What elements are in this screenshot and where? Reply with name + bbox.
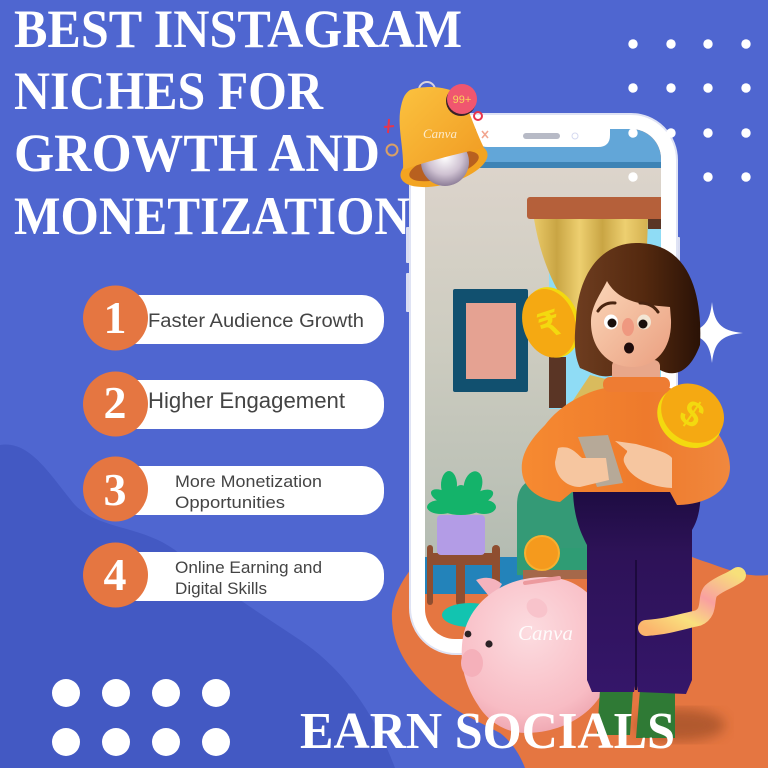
window (549, 219, 661, 409)
list item 3: Opportunities (175, 494, 285, 512)
title: GROWTH AND (14, 123, 380, 183)
list item 3: More Monetization (175, 473, 322, 491)
squiggle (646, 575, 738, 628)
bell watermark: Canva (423, 126, 457, 141)
title (14, 0, 462, 246)
title: NICHES FOR (14, 61, 324, 121)
bell body (400, 87, 484, 170)
title: BEST INSTAGRAM (14, 0, 462, 59)
sofa (517, 478, 590, 579)
bell loop (419, 82, 435, 98)
dollar coin (645, 371, 736, 461)
curtain rod (527, 197, 667, 219)
brows (598, 303, 658, 312)
picture frame (453, 289, 528, 392)
phone side buttons (406, 227, 680, 312)
coin slot (525, 578, 559, 583)
woman character (522, 243, 736, 741)
small coin (525, 536, 559, 570)
list item 4: 4 (104, 549, 126, 600)
hair back (575, 243, 700, 376)
left hand (555, 447, 609, 487)
pot (437, 515, 485, 555)
list item 3: 3 (104, 464, 126, 515)
piggy bank (461, 577, 612, 733)
rupee coin (513, 280, 589, 366)
sparkle marks (384, 112, 488, 156)
decorative dots top right (628, 39, 751, 182)
bell rim (396, 134, 492, 196)
phone screen scene (425, 129, 667, 639)
face (591, 281, 671, 367)
dollar coin: $ (672, 391, 712, 436)
list item 4: Online Earning and (175, 559, 322, 577)
camera (572, 133, 578, 139)
decorative dots bottom left (52, 679, 230, 756)
list item 4 (83, 542, 384, 608)
plant (427, 469, 496, 515)
floor shadow (635, 709, 725, 741)
title: MONETIZATION (14, 186, 410, 246)
phone mockup (406, 114, 680, 654)
trousers (573, 492, 701, 694)
list item 1: Faster Audience Growth (148, 311, 364, 332)
collar (603, 377, 670, 392)
rupee coin: ₹ (534, 304, 566, 347)
list item 1 (83, 286, 384, 350)
phone frame (410, 114, 677, 654)
nose (622, 318, 634, 336)
phone notch (476, 129, 610, 147)
boots (597, 690, 675, 738)
list item 2 (83, 372, 384, 436)
eyes (604, 314, 651, 330)
orange blob (392, 520, 768, 768)
held phone (578, 435, 623, 487)
list item 4: Digital Skills (175, 580, 267, 598)
plant stand (427, 545, 500, 606)
notification bell (384, 82, 492, 196)
list item 3 (83, 456, 384, 522)
pig ear (476, 578, 502, 600)
mouth (624, 342, 634, 354)
list item 1: 1 (104, 292, 126, 343)
dark blue wave shape (0, 445, 395, 768)
rug (442, 603, 480, 627)
right hand (615, 441, 672, 488)
sparkle star (682, 302, 743, 363)
pig snout (461, 649, 483, 677)
pig top ear (523, 594, 551, 622)
pig body (462, 577, 612, 733)
list item 2: 2 (104, 377, 126, 428)
speaker (523, 133, 560, 139)
bell clapper (421, 138, 469, 186)
badge: 99+ (453, 94, 471, 106)
neck (612, 360, 660, 382)
list item 2: Higher Engagement (148, 388, 345, 413)
pig eyes (465, 631, 493, 648)
brand name: EARN SOCIALS (300, 703, 675, 760)
sweater (522, 388, 730, 505)
curtain (534, 219, 648, 312)
watermark: Canva (518, 621, 573, 645)
